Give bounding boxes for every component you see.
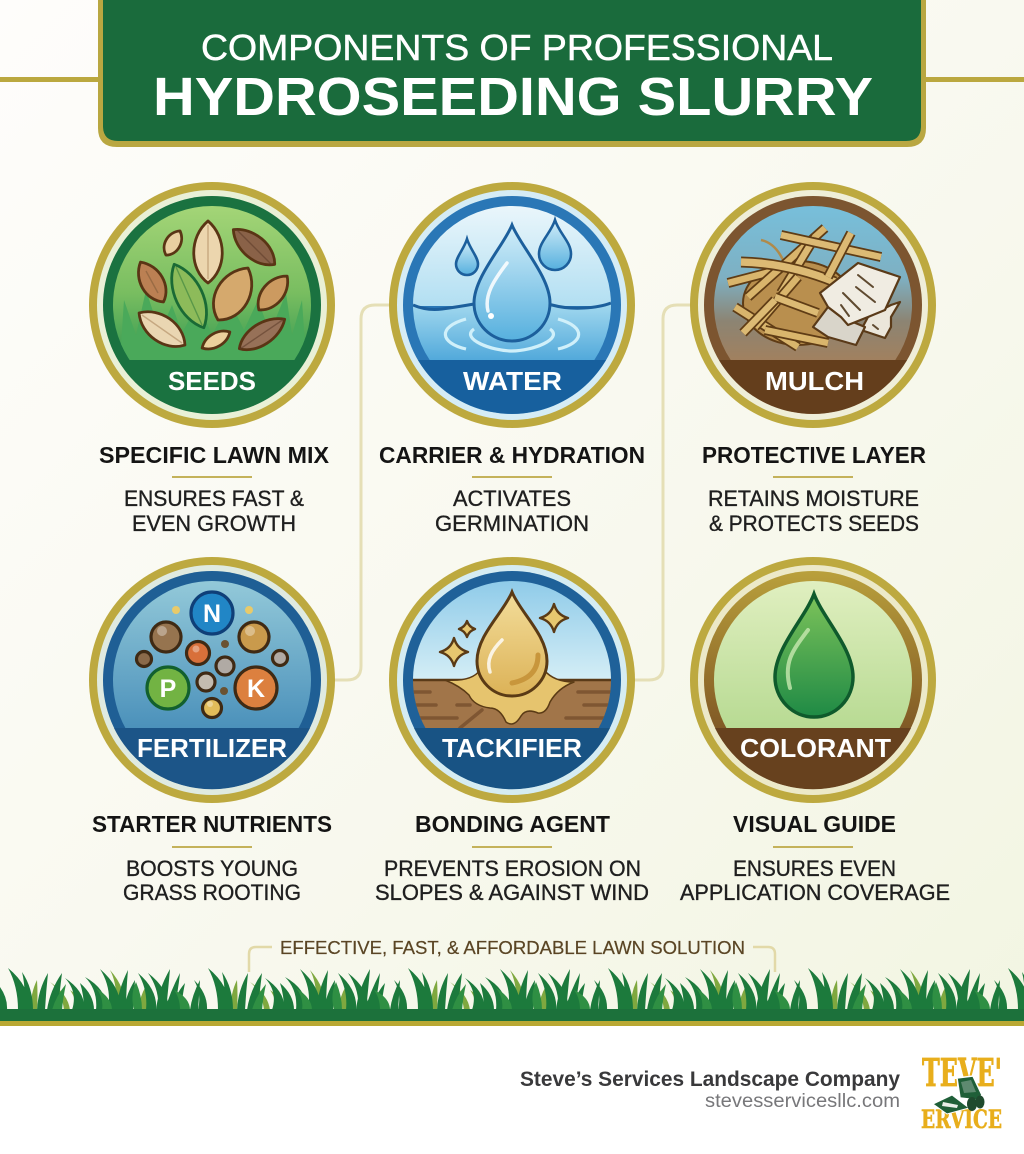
text block: fertilizer: STARTER NUTRIENTS [92,811,332,837]
label: mulch: MULCH [765,366,864,396]
text block: water: GERMINATION [435,511,589,536]
grass strip [0,968,1024,1026]
text block: tackifier: SLOPES & AGAINST WIND [375,880,649,905]
label: water: WATER [463,366,562,396]
icon: tackifier drop on soil [413,581,611,730]
title line 2: HYDROSEEDING SLURRY [153,67,873,127]
icon: mulch straw and paper [714,206,912,366]
badge rings [690,557,936,803]
nutrient P [147,667,189,709]
text block: fertilizer: BOOSTS YOUNG [126,856,298,881]
text block: mulch: & PROTECTS SEEDS [709,511,919,536]
badge rings [389,182,635,428]
footer website: stevesservicesllc.com [705,1091,900,1112]
nutrient N [191,592,233,634]
label: seeds: SEEDS [168,366,256,396]
text block: seeds: ENSURES FAST & [124,486,304,511]
badge rings [89,557,335,803]
header rules [0,77,1024,82]
text block: mulch [702,442,926,536]
text block: fertilizer [92,811,332,905]
label: tackifier: TACKIFIER [442,733,582,763]
title banner [98,0,926,147]
panel: fertilizer [89,557,335,803]
icon: water drops [413,206,611,365]
callout: EFFECTIVE, FAST, & AFFORDABLE LAWN SOLUTION [280,938,745,958]
panel: seeds [89,182,335,428]
text block: seeds: SPECIFIC LAWN MIX [99,442,330,468]
text block: mulch: PROTECTIVE LAYER [702,442,926,468]
nutrient K: K [247,675,265,703]
icon: skid steer [933,1076,984,1114]
label: colorant: COLORANT [740,733,891,763]
text block: tackifier: PREVENTS EROSION ON [384,856,641,881]
panel: colorant [690,557,936,803]
text block: fertilizer: GRASS ROOTING [123,880,301,905]
footer background [0,1026,1024,1154]
badge rings [690,182,936,428]
text block: seeds: EVEN GROWTH [132,511,296,536]
text block: water [379,442,645,536]
panel: tackifier [389,557,635,803]
text block: tackifier: BONDING AGENT [415,811,610,837]
logo [921,1050,1002,1134]
nutrient P: P [160,675,176,703]
footer company name: Steve’s Services Landscape Company [520,1067,900,1091]
badge rings [89,182,335,428]
panel: water [389,182,635,428]
text block: colorant: VISUAL GUIDE [733,811,896,837]
connector: tackifier to mulch [632,305,692,680]
nutrient K [235,667,277,709]
text block: water: CARRIER & HYDRATION [379,442,645,468]
text block: colorant: ENSURES EVEN [733,856,896,881]
text block: colorant: APPLICATION COVERAGE [680,880,950,905]
text block: seeds [99,442,330,536]
text block: colorant [680,811,950,905]
callout brackets [249,947,775,972]
nutrient N: N [203,600,221,628]
title line 1: COMPONENTS OF PROFESSIONAL [201,27,833,68]
text block: water: ACTIVATES [453,486,571,511]
connector: fertilizer to water [332,305,392,680]
panel: mulch [690,182,936,428]
text block: mulch: RETAINS MOISTURE [708,486,919,511]
icon: seeds [113,206,311,366]
label: fertilizer: FERTILIZER [137,733,287,763]
badge rings [389,557,635,803]
text block: tackifier [375,811,649,905]
icon: NPK granules [113,581,311,731]
icon: green drop [714,581,912,731]
